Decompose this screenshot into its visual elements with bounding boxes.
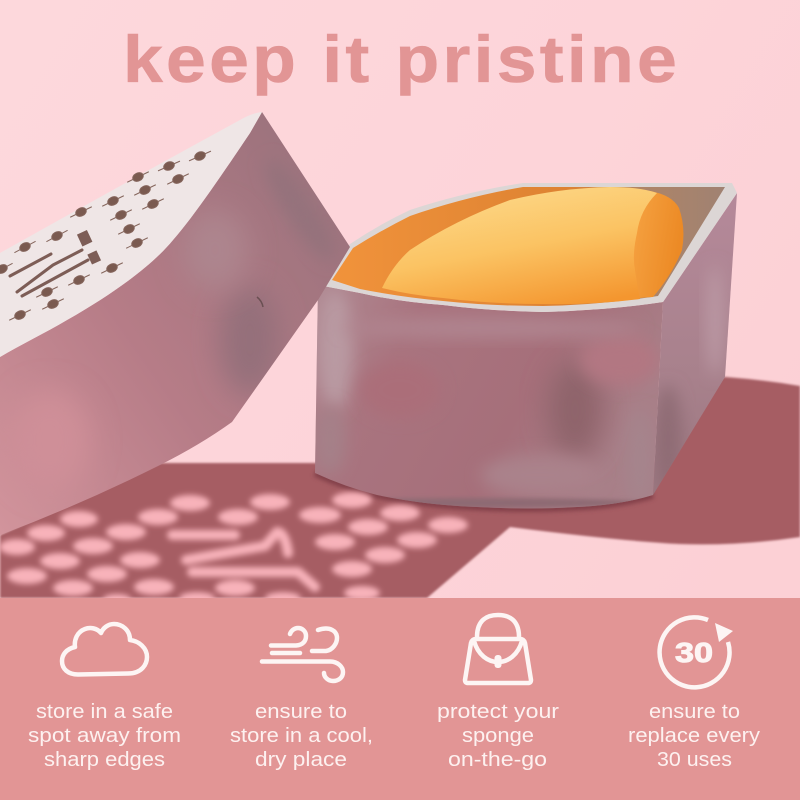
shadow shape — [0, 377, 800, 598]
caption — [28, 701, 181, 771]
caption: replace every — [628, 725, 760, 747]
caption: on-the-go — [448, 749, 547, 771]
tip: replace every 30 uses — [628, 617, 760, 771]
sponge case base — [310, 183, 737, 510]
caption: protect your — [437, 701, 559, 723]
caption: 30 uses — [657, 749, 732, 771]
lid underside — [0, 112, 350, 535]
lid logo cutout — [10, 230, 101, 296]
icon: wind — [262, 628, 343, 681]
icon: handbag — [465, 615, 531, 683]
case front face — [315, 285, 663, 508]
caption: sponge — [462, 725, 534, 747]
sponge angled face — [382, 187, 657, 304]
icon: 30 uses cycle — [660, 617, 733, 687]
orange sponge — [382, 187, 683, 304]
caption: ensure to — [649, 701, 740, 723]
caption — [437, 701, 559, 771]
case right side — [653, 193, 737, 495]
caption: sharp edges — [44, 749, 165, 771]
title: keep it pristine — [123, 22, 680, 96]
caption — [628, 701, 760, 771]
bottom tips panel — [0, 598, 800, 800]
caption: store in a cool, — [230, 725, 373, 747]
caption: store in a safe — [36, 701, 173, 723]
case rim — [318, 183, 737, 312]
caption: dry place — [255, 749, 347, 771]
lid vent holes — [0, 147, 213, 324]
caption: spot away from — [28, 725, 181, 747]
sponge case lid — [0, 112, 350, 535]
light spots through lid holes — [0, 492, 468, 604]
lid top face — [0, 112, 262, 357]
tip: protect on the go — [437, 615, 559, 771]
sponge end cap — [620, 188, 683, 299]
icon: 30 uses cycle: 30 — [675, 637, 713, 668]
icon: cloud — [62, 624, 147, 674]
tip: cool dry place — [230, 628, 373, 771]
caption: ensure to — [255, 701, 347, 723]
contact shadow under box — [315, 473, 653, 508]
case interior — [332, 187, 725, 306]
cast shadow with logo pattern — [0, 377, 800, 604]
caption — [230, 701, 373, 771]
tip: safe storage — [28, 624, 181, 771]
